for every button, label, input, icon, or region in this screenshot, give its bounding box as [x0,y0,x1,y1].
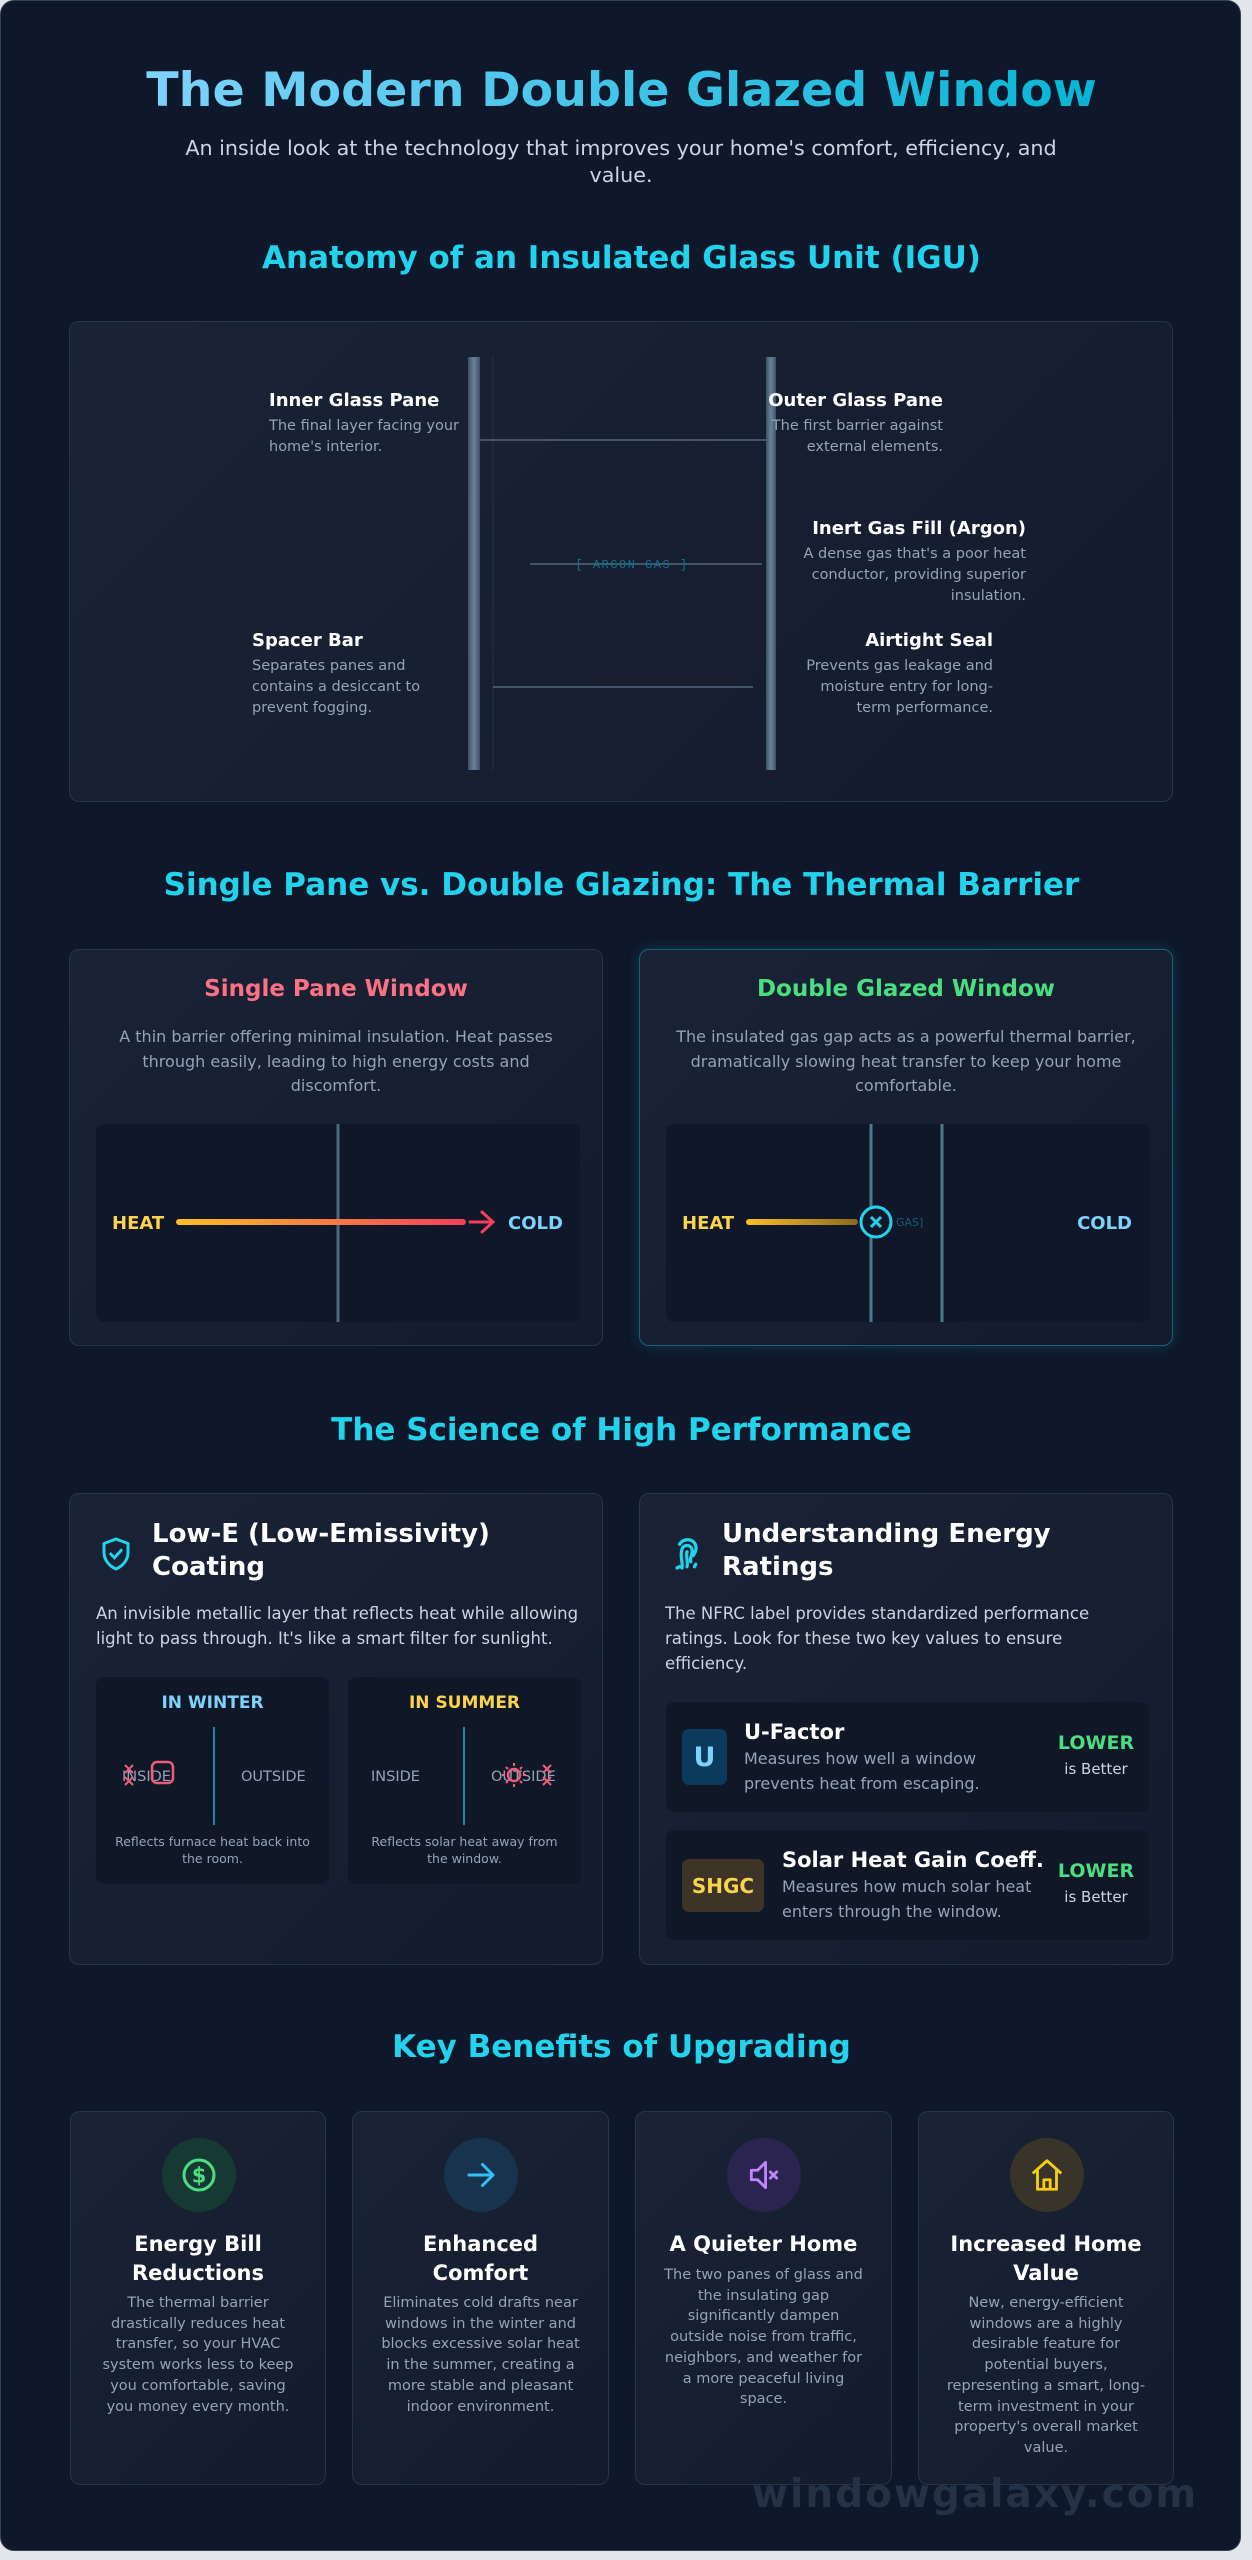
panel: energy ratings [639,1493,1173,1965]
sub-panel: summer: IN SUMMER [409,1693,520,1713]
rating: SHGC: SHGC [692,1874,754,1898]
panel: single pane [69,949,603,1346]
heading: science: The Science of High Performance [331,1412,912,1448]
panel: IGU anatomy: Airtight Seal [865,630,993,651]
benefit card: comfort: Eliminates cold drafts near windows in the winter and blocks excessive solar heat in the summer, creating a more stable and pleasant indoor environment. [381,2295,580,2415]
rating: U-Factor: LOWER [1058,1732,1134,1754]
panel: IGU anatomy: Separates panes and contains a desiccant to prevent fogging. [252,658,420,716]
card title: Single Pane Window [204,976,468,1002]
card description: The insulated gas gap acts as a powerful thermal barrier, dramatically slowing heat transfer to keep your home comfortable. [676,1027,1136,1095]
icon: shield [102,1538,130,1570]
sub-panel: summer: INSIDE [371,1769,420,1785]
benefit card: home value: New, energy-efficient windows are a highly desirable feature for potential buyers, representing a smart, long-term investment in your property's overall market value. [947,2295,1145,2456]
benefit card: energy bill: The thermal barrier drastically reduces heat transfer, so your HVAC system works less to keep you comfortable, saving you money every month. [102,2295,294,2415]
rating: SHGC: is Better [1064,1888,1128,1906]
benefit card: comfort [352,2111,609,2485]
icon: house [1010,2138,1084,2212]
sub-panel: winter: IN WINTER [161,1693,264,1713]
diagram: heat blocked: GAS] [896,1216,923,1229]
panel: IGU anatomy [69,321,1173,802]
icon: fingerprint [675,1538,698,1570]
panel: IGU anatomy: The first barrier against external elements. [772,418,943,455]
sub-panel: winter: Reflects furnace heat back into the room. [115,1834,310,1866]
benefit card: quieter home: The two panes of glass and the insulating gap significantly dampen outside noise from traffic, neighbors, and weather for a more peaceful living space. [664,2267,863,2407]
diagram: heat blocked: HEAT [682,1213,735,1234]
panel: IGU anatomy: Prevents gas leakage and moisture entry for long-term performance. [806,658,993,716]
panel: IGU anatomy: Spacer Bar [252,630,363,651]
label: inner glass pane [268,390,459,455]
diagram: glass panes: [ ARGON GAS ] [575,558,689,572]
heading: thermal barrier: Single Pane vs. Double Glazing: The Thermal Barrier [164,867,1079,903]
card description: The NFRC label provides standardized performance ratings. Look for these two key values to ensure efficiency. [665,1604,1089,1673]
rating: SHGC: Solar Heat Gain Coeff. [782,1848,1044,1872]
benefit card: quieter home: A Quieter Home [670,2232,857,2256]
panel: IGU anatomy: Inner Glass Pane [269,390,439,411]
benefit card: home value [918,2111,1174,2485]
diagram: heat passing through: COLD [508,1213,563,1234]
label: outer glass pane [768,390,943,455]
heading: benefits: Key Benefits of Upgrading [392,2029,851,2065]
sub-panel: winter: INSIDE [122,1769,171,1785]
panel: IGU anatomy: Outer Glass Pane [768,390,943,411]
diagram: heat blocked [666,1124,1150,1322]
panel: IGU anatomy: The final layer facing your home's interior. [269,418,459,455]
icon: arrow [444,2138,518,2212]
rating: U-Factor: is Better [1064,1760,1128,1778]
rating: SHGC: LOWER [1058,1860,1134,1882]
panel: double glazed [639,949,1173,1346]
label: spacer bar [252,630,420,716]
rating: SHGC: Measures how much solar heat enters through the window. [782,1877,1031,1921]
diagram: heat blocked: COLD [1077,1213,1132,1234]
diagram: heat passing through [96,1124,580,1322]
rating: U-Factor: U [694,1742,715,1772]
benefit card: energy bill: Energy Bill Reductions [132,2232,264,2285]
panel: IGU anatomy: Inert Gas Fill (Argon) [812,518,1026,539]
card description: A thin barrier offering minimal insulation. Heat passes through easily, leading to high energy costs and discomfort. [119,1027,553,1095]
heading: anatomy: Anatomy of an Insulated Glass Unit (IGU) [262,240,981,276]
rating: SHGC [666,1830,1149,1940]
panel: IGU anatomy: A dense gas that's a poor heat conductor, providing superior insulation. [804,546,1026,604]
sub-panel: winter [96,1677,329,1884]
benefit card: comfort: Enhanced Comfort [423,2232,538,2285]
card title: Double Glazed Window [757,976,1055,1002]
sub-panel: summer [348,1677,581,1884]
benefit card: quieter home [635,2111,892,2485]
label: airtight seal [806,630,993,716]
sub-panel: winter: OUTSIDE [241,1769,306,1785]
diagram: glass panes [468,357,776,770]
card heading: Understanding Energy Ratings [722,1519,1051,1582]
label: inert gas fill [804,518,1026,604]
subtitle: An inside look at the technology that improves your home's comfort, efficiency, and value. [185,136,1057,187]
panel: low-e coating [69,1493,603,1965]
benefit card: home value: Increased Home Value [950,2232,1142,2285]
benefit card: energy bill [70,2111,326,2485]
rating: U-Factor: U-Factor [744,1720,844,1744]
sub-panel: summer: OUTSIDE [491,1769,556,1785]
icon: muted speaker [727,2138,801,2212]
diagram: heat passing through: HEAT [112,1213,165,1234]
watermark: windowgalaxy.com [752,2472,1198,2517]
rating: U-Factor [666,1702,1149,1812]
rating: U-Factor: Measures how well a window prevents heat from escaping. [744,1749,980,1793]
icon: dollar [162,2138,236,2212]
card description: An invisible metallic layer that reflects heat while allowing light to pass through. It's like a smart filter for sunlight. [96,1604,578,1648]
icon: dollar: $ [192,2164,206,2188]
title: The Modern Double Glazed Window [146,63,1097,118]
card heading: Low-E (Low-Emissivity) Coating [152,1519,490,1582]
sub-panel: summer: Reflects solar heat away from the window. [371,1834,558,1866]
